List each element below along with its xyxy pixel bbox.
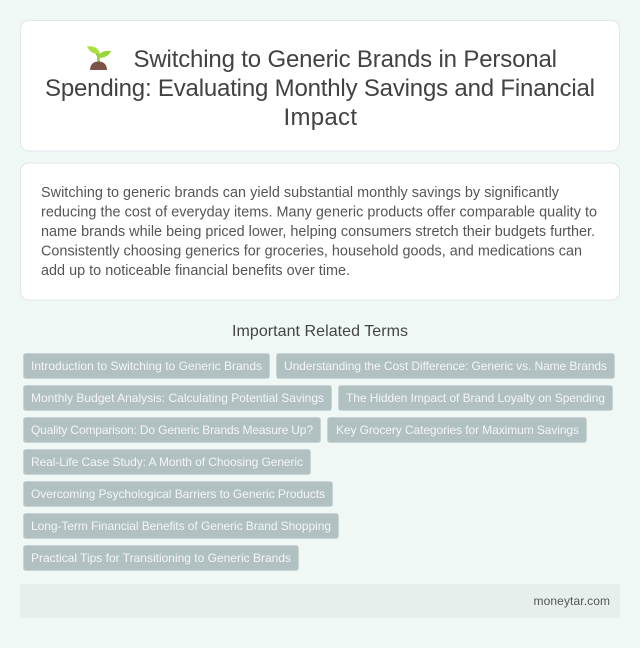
chip: Quality Comparison: Do Generic Brands Measure Up?	[31, 423, 313, 437]
panel: title card	[20, 20, 620, 151]
title: Spending: Evaluating Monthly Savings and Financial	[45, 75, 595, 102]
chip	[24, 354, 270, 378]
text block: description	[41, 185, 597, 279]
chip	[338, 386, 612, 410]
icon: seedling	[87, 46, 111, 70]
text block: description: add up to noticeable financial benefits over time.	[41, 263, 350, 279]
chip	[328, 418, 586, 442]
chip: Real-Life Case Study: A Month of Choosing Generic	[31, 455, 303, 469]
title: Switching to Generic Brands in Personal	[134, 46, 557, 73]
title: Impact	[284, 104, 357, 131]
chip: Introduction to Switching to Generic Brands	[31, 359, 262, 373]
title	[45, 46, 595, 131]
chip: Understanding the Cost Difference: Generic vs. Name Brands	[284, 359, 607, 373]
chip: Long-Term Financial Benefits of Generic Brand Shopping	[31, 519, 331, 533]
panel: description	[20, 163, 620, 300]
panel: term chips	[24, 354, 614, 570]
chip	[276, 354, 614, 378]
chip	[24, 386, 332, 410]
chip: Overcoming Psychological Barriers to Generic Products	[31, 487, 325, 501]
chip: Monthly Budget Analysis: Calculating Potential Savings	[31, 391, 324, 405]
chip	[24, 450, 310, 474]
chip: The Hidden Impact of Brand Loyalty on Spending	[346, 391, 605, 405]
chip: Practical Tips for Transitioning to Generic Brands	[31, 551, 291, 565]
heading: related terms: Important Related Terms	[232, 323, 408, 340]
text block: description: name brands while being priced lower, helping consumers stretch their budgets further.	[41, 224, 595, 240]
chip	[24, 514, 338, 538]
chip: Key Grocery Categories for Maximum Savings	[336, 423, 579, 437]
chip	[24, 482, 332, 506]
text block: description: Consistently choosing generics for groceries, household goods, and medications can	[41, 244, 582, 260]
text block: description: reducing the cost of everyday items. Many generic products offer comparable quality to	[41, 204, 597, 220]
footer source text: moneytar.com	[534, 594, 610, 608]
chip	[24, 418, 320, 442]
footer	[20, 584, 620, 618]
text block: description: Switching to generic brands can yield substantial monthly savings by significantly	[41, 185, 560, 201]
chip	[24, 546, 298, 570]
